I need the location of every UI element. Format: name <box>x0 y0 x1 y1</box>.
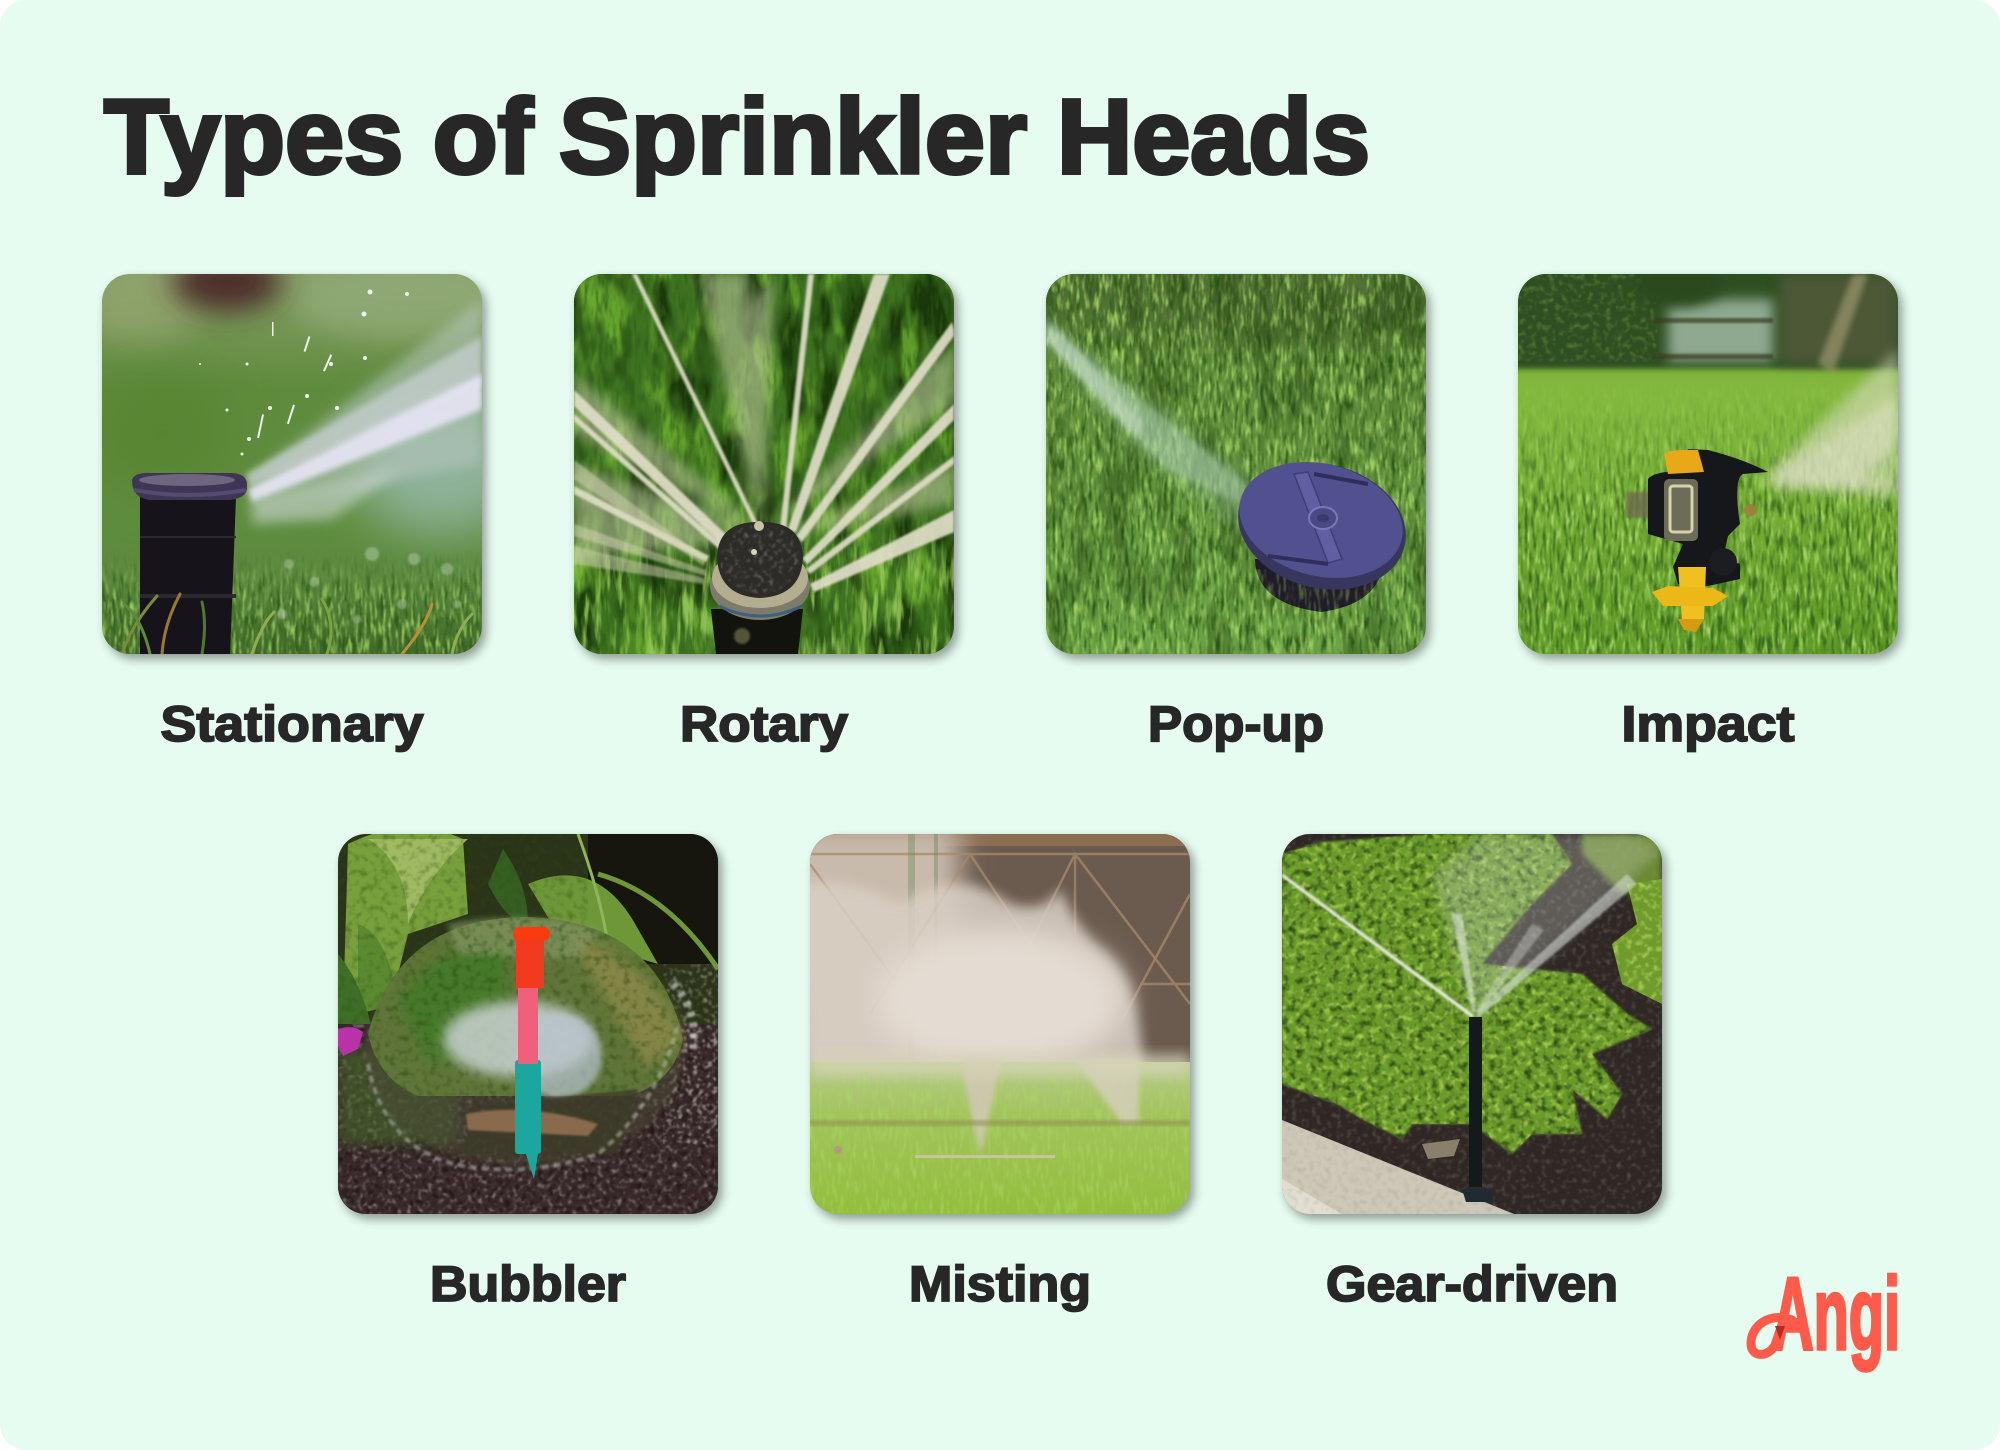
panel: rotary <box>574 274 958 659</box>
photo: stationary sprinkler <box>102 274 482 654</box>
panel: stationary <box>100 272 492 666</box>
label: stationary: Stationary <box>160 696 424 752</box>
photo: gear-driven sprinkler <box>1282 834 1662 1214</box>
label: pop-up: Pop-up <box>1148 696 1324 752</box>
photo: rotary sprinkler <box>574 274 954 654</box>
title <box>104 78 1370 196</box>
photo: misting sprinkler <box>810 834 1190 1214</box>
panel: impact <box>1516 272 1908 666</box>
title: Sprinkler <box>559 78 1027 196</box>
label: rotary: Rotary <box>680 696 848 752</box>
panel: misting <box>770 824 1194 1219</box>
photo: pop-up sprinkler <box>1046 274 1426 654</box>
label: gear-driven: Gear-driven <box>1326 1256 1618 1312</box>
title: Types of <box>104 78 534 196</box>
logo: Angi <box>1751 1256 1900 1371</box>
photo: bubbler sprinkler <box>338 828 718 1214</box>
panel: pop-up <box>1044 272 1436 666</box>
title: Heads <box>1057 78 1370 196</box>
panel: gear-driven <box>1282 834 1666 1219</box>
panel: bubbler <box>338 828 722 1219</box>
label: impact: Impact <box>1622 696 1795 752</box>
photo: impact sprinkler <box>1518 274 1898 654</box>
logo: Angi: Angi <box>1772 1256 1900 1371</box>
label: bubbler: Bubbler <box>430 1256 626 1312</box>
label: misting: Misting <box>909 1256 1091 1312</box>
